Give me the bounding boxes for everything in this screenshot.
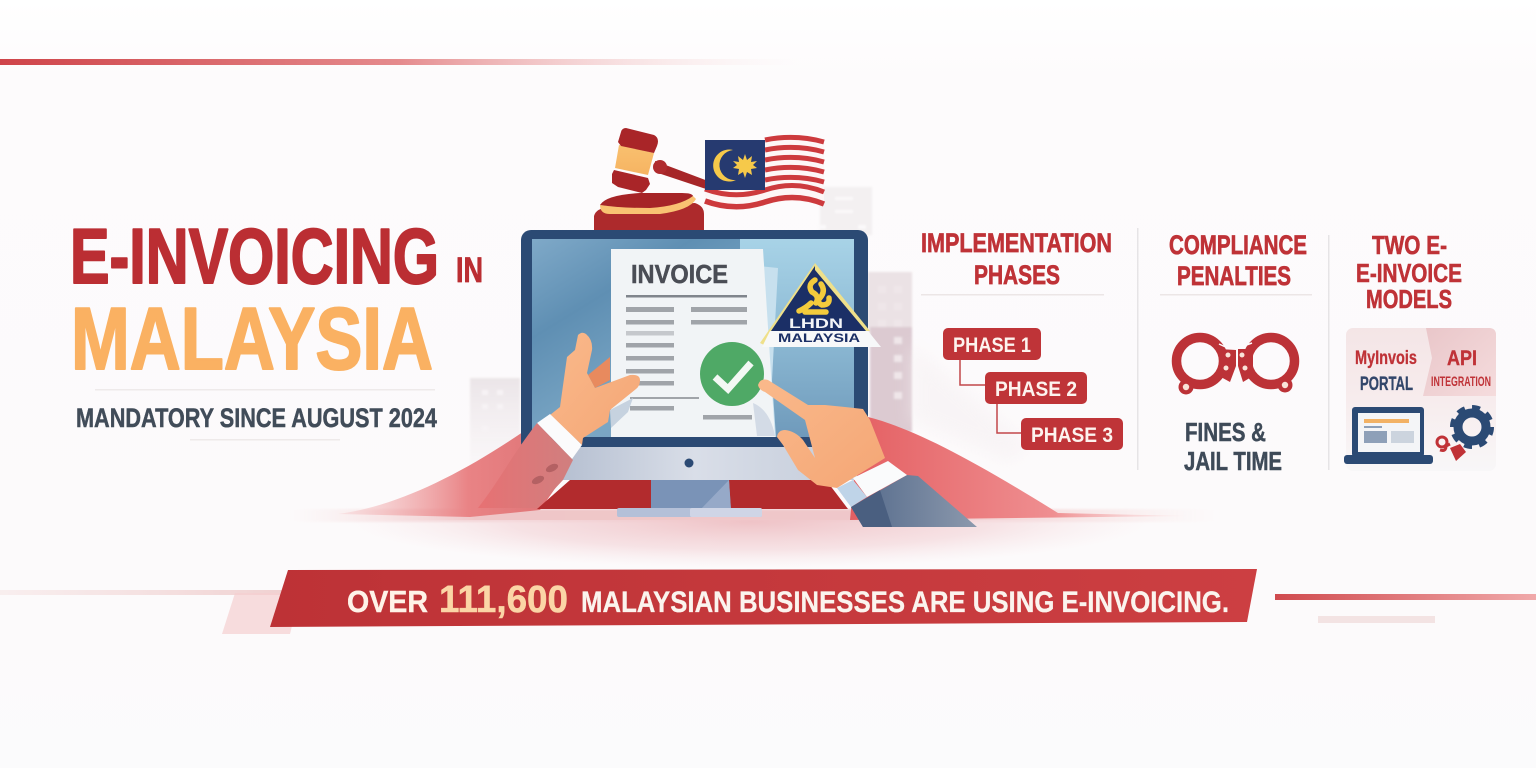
phase 1 [943, 328, 1041, 360]
heading: implementation phases: PHASES [974, 260, 1060, 290]
title: IN [456, 251, 483, 290]
red swoosh left [338, 420, 575, 517]
model: api integration [1423, 328, 1496, 396]
left hand [478, 333, 640, 508]
background city buildings [470, 187, 912, 488]
heading: implementation phases: IMPLEMENTATION [921, 228, 1112, 258]
bottom accent lines [0, 590, 1536, 623]
phase 1: PHASE 1 [953, 334, 1031, 357]
green check badge [700, 342, 764, 406]
gavel and block [594, 128, 708, 230]
heading: two e-invoice models: E-INVOICE [1356, 258, 1462, 288]
heading: compliance penalties: PENALTIES [1177, 261, 1291, 291]
icon: handcuffs [1176, 338, 1294, 394]
heading: two e-invoice models [1356, 230, 1462, 314]
LHDN logo [760, 263, 881, 347]
statistic banner: OVER [347, 584, 428, 619]
red swoosh right [850, 415, 1190, 520]
icon: padlock [1437, 437, 1466, 461]
subtitle: MANDATORY SINCE AUGUST 2024 [76, 403, 437, 433]
fines and jail time: JAIL TIME [1184, 446, 1282, 476]
implementation phases panel [921, 228, 1123, 450]
phase 3 [1021, 418, 1123, 450]
model: myinvois portal [1355, 348, 1417, 395]
title: E-INVOICING [70, 212, 439, 300]
statistic banner: MALAYSIAN BUSINESSES ARE USING E-INVOICING. [581, 586, 1229, 619]
statistic banner: 111,600 [439, 579, 568, 621]
e-invoice models panel [1344, 230, 1496, 471]
icon: laptop [1344, 407, 1433, 464]
phase 3: PHASE 3 [1031, 424, 1113, 447]
statistic banner [222, 569, 1257, 634]
heading: compliance penalties: COMPLIANCE [1169, 230, 1307, 260]
fines and jail time: FINES & [1185, 417, 1266, 447]
floor shadow [332, 508, 1154, 560]
phase connectors [960, 360, 1021, 433]
icon: gear [1452, 408, 1492, 446]
LHDN logo: LHDN [789, 315, 843, 331]
panel background [1346, 328, 1496, 471]
soft background shape right [912, 345, 1030, 462]
top accent line [0, 59, 800, 65]
phase 2: PHASE 2 [995, 378, 1077, 401]
model: api integration: API [1447, 347, 1477, 370]
heading: implementation phases [921, 228, 1112, 296]
invoice document: INVOICE [631, 259, 728, 289]
title [70, 212, 483, 388]
heading: two e-invoice models: TWO E- [1372, 230, 1447, 260]
title: MALAYSIA [71, 289, 433, 388]
model: myinvois portal: PORTAL [1360, 374, 1413, 395]
invoice document [610, 249, 778, 437]
right hand [758, 380, 977, 527]
LHDN logo: MALAYSIA [778, 333, 860, 345]
heading: two e-invoice models: MODELS [1366, 284, 1452, 314]
model: api integration: INTEGRATION [1431, 373, 1491, 389]
fines and jail time [1184, 417, 1282, 476]
heading: compliance penalties [1160, 230, 1312, 296]
model: myinvois portal: MyInvois [1355, 348, 1417, 369]
phase 2 [985, 372, 1087, 404]
malaysian flag [705, 136, 824, 207]
compliance penalties panel [1160, 230, 1312, 476]
monitor [521, 230, 868, 517]
